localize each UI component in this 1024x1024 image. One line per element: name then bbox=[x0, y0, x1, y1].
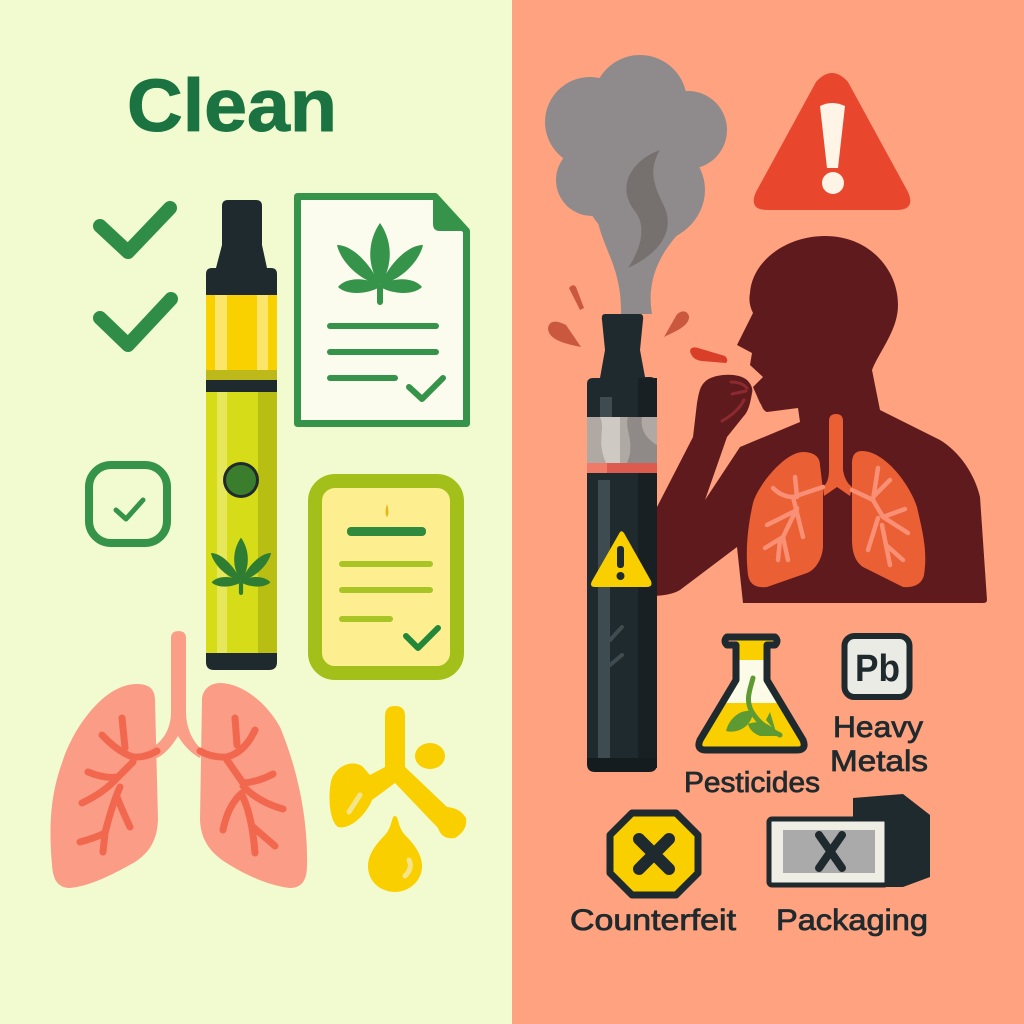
icon: check badge bbox=[89, 465, 167, 543]
product label card bbox=[315, 481, 457, 673]
label: heavy metals: Heavy bbox=[833, 711, 923, 744]
icon: oil drops and airway bbox=[330, 706, 466, 892]
person silhouette bbox=[650, 236, 987, 603]
icon: check mark one bbox=[100, 208, 170, 252]
icon: heavy metals Pb: Pb bbox=[855, 648, 900, 690]
title: Clean bbox=[127, 64, 337, 147]
cough marks bbox=[548, 285, 727, 363]
clean vape pen bbox=[206, 200, 277, 670]
icon: heavy metals Pb bbox=[844, 636, 910, 697]
icon: warning triangle bbox=[754, 73, 910, 210]
contaminated vape pen bbox=[587, 314, 657, 772]
smoke cloud bbox=[545, 55, 727, 314]
panel: contaminated background bbox=[512, 0, 1024, 1024]
icon: check mark two bbox=[100, 299, 171, 345]
icon: flask pesticides bbox=[699, 637, 804, 750]
label: pesticides: Pesticides bbox=[684, 767, 820, 799]
label: heavy metals: Metals bbox=[830, 745, 928, 778]
panel: clean background bbox=[0, 0, 512, 1024]
label: packaging: Packaging bbox=[776, 904, 928, 937]
icon: packaging box bbox=[769, 794, 930, 887]
healthy lungs bbox=[50, 631, 307, 888]
hand strokes bbox=[722, 382, 747, 421]
icon: counterfeit octagon bbox=[610, 813, 698, 895]
label: counterfeit: Counterfeit bbox=[570, 904, 737, 937]
damaged lungs bbox=[747, 414, 925, 587]
lab report document bbox=[298, 196, 468, 424]
